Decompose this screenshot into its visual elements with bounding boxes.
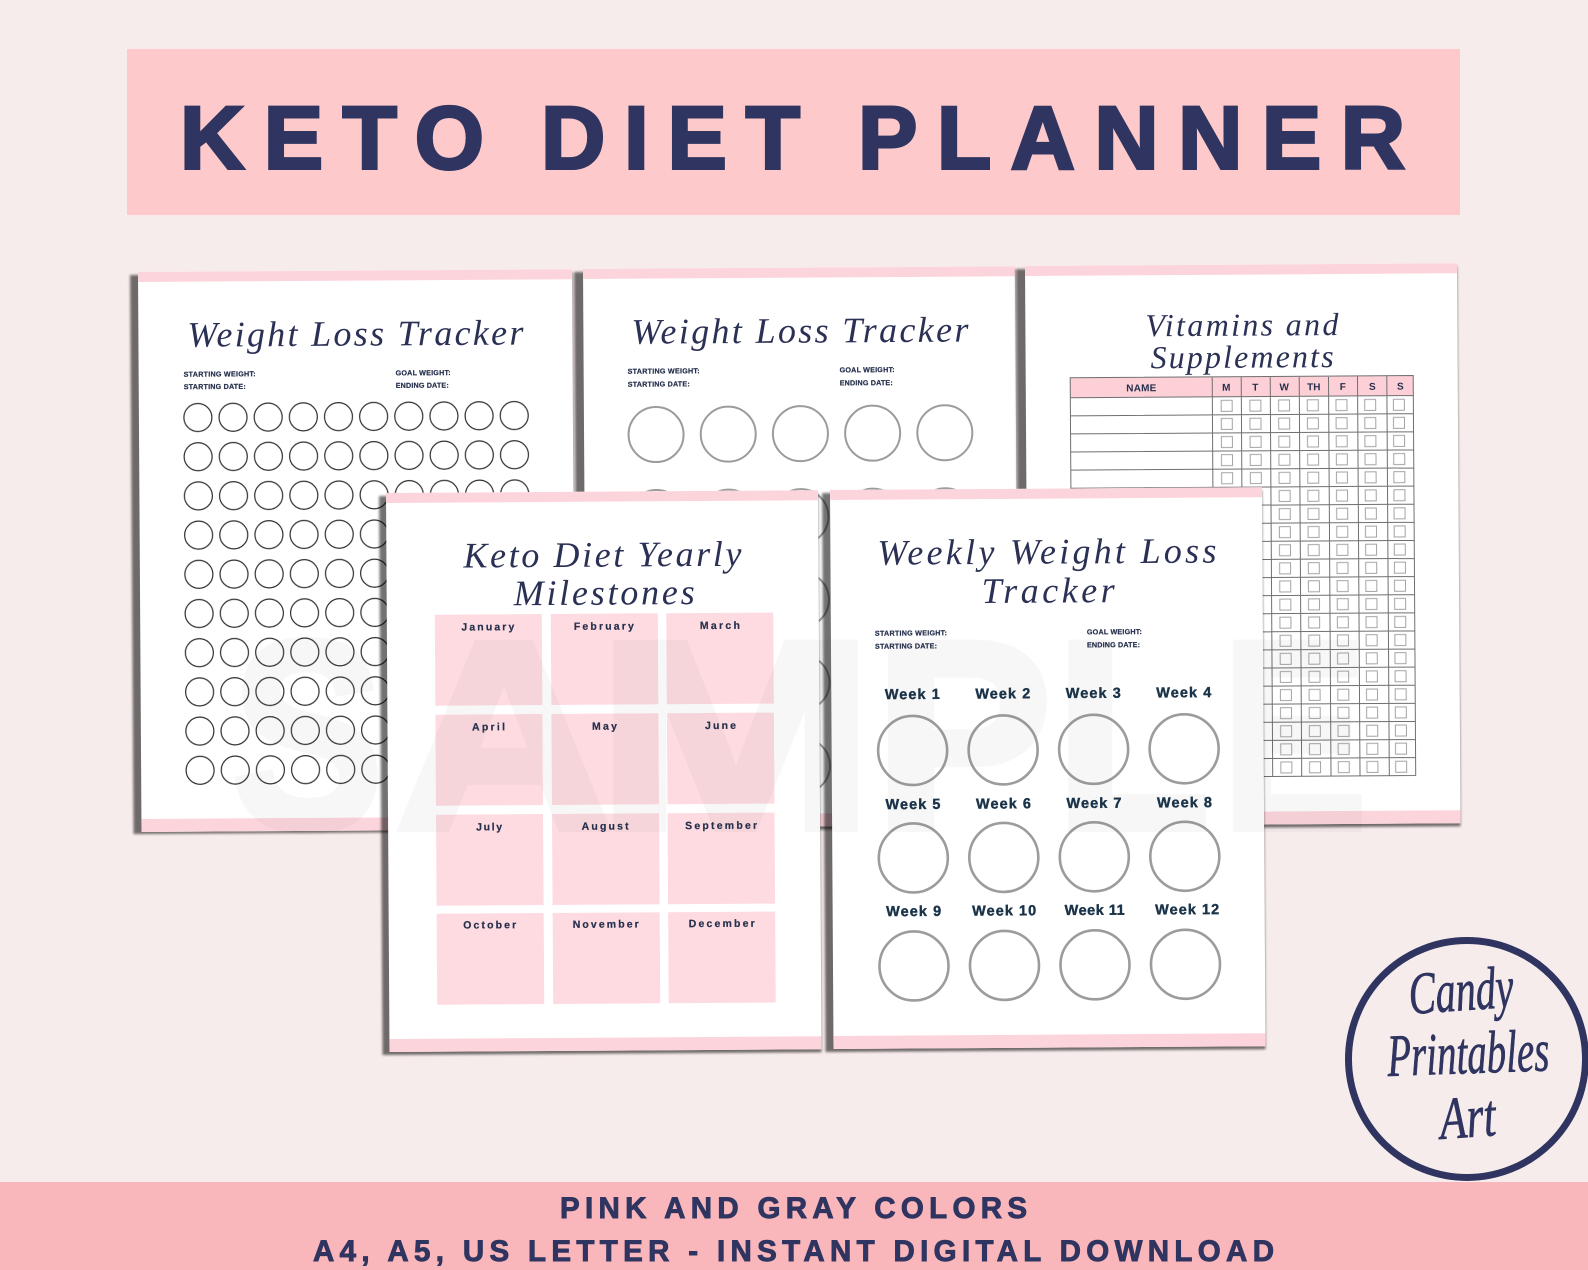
week circles <box>878 714 1220 1001</box>
week labels: Week 8 <box>1157 795 1212 811</box>
footer band <box>0 1182 1588 1270</box>
heading: Weekly Weight Loss <box>877 531 1217 573</box>
heading <box>1145 306 1340 375</box>
heading <box>462 534 742 614</box>
table header <box>1126 382 1404 394</box>
week labels: Week 6 <box>976 796 1031 813</box>
title banner <box>127 49 1460 215</box>
panel: vitamins and supplements <box>1016 263 1461 829</box>
week labels: Week 4 <box>1156 685 1211 701</box>
heading: Weight Loss Tracker <box>187 313 524 355</box>
month grid: October <box>463 919 516 932</box>
field labels: STARTING WEIGHT: <box>184 369 256 379</box>
sample watermark <box>232 585 1367 885</box>
month grid: April <box>472 721 505 733</box>
logo: candy printables art: Art <box>1434 1082 1499 1152</box>
footer band: A4, A5, US LETTER - INSTANT DIGITAL DOWNLOAD <box>313 1235 1274 1268</box>
week labels: Week 12 <box>1155 902 1219 918</box>
circle grid <box>180 396 534 790</box>
panel: weight loss tracker with large circles <box>574 266 1019 831</box>
field labels <box>184 368 451 391</box>
heading: Milestones <box>513 572 695 613</box>
field labels: GOAL WEIGHT: <box>1087 627 1142 636</box>
field labels: GOAL WEIGHT: <box>396 368 451 377</box>
table header: NAME <box>1126 383 1157 394</box>
field labels: STARTING WEIGHT: <box>628 366 700 376</box>
table header: TH <box>1307 382 1320 393</box>
sample watermark: P <box>874 585 1052 885</box>
field labels: STARTING DATE: <box>875 641 937 651</box>
field labels: STARTING DATE: <box>628 379 690 389</box>
week labels: Week 3 <box>1066 686 1121 702</box>
month grid: February <box>574 620 634 633</box>
field labels: STARTING DATE: <box>184 382 246 391</box>
heading: Supplements <box>1150 338 1334 375</box>
month grid: August <box>582 820 629 833</box>
title banner: PLANNER <box>858 88 1405 188</box>
field labels: GOAL WEIGHT: <box>840 365 895 374</box>
sample watermark: M <box>596 585 875 885</box>
table header: S <box>1397 382 1404 393</box>
table header: T <box>1252 383 1258 394</box>
month grid: January <box>461 621 515 634</box>
sample watermark: E <box>1222 585 1367 885</box>
field labels: ENDING DATE: <box>1087 640 1140 649</box>
month grid: December <box>689 918 755 930</box>
field labels: STARTING WEIGHT: <box>875 628 947 638</box>
footer band: PINK AND GRAY COLORS <box>560 1192 1027 1225</box>
panel: weight loss tracker with 100 circles <box>130 269 576 834</box>
table header: M <box>1222 383 1230 394</box>
field labels: ENDING DATE: <box>396 381 449 390</box>
week labels: Week 7 <box>1066 796 1122 812</box>
title banner: KETO <box>180 88 484 188</box>
field labels <box>628 365 895 389</box>
sample watermark: L <box>1055 585 1210 885</box>
week labels: Week 2 <box>975 686 1030 703</box>
week labels: Week 5 <box>885 797 941 813</box>
table header: W <box>1280 382 1290 393</box>
table header: S <box>1369 382 1376 393</box>
supplements table <box>1070 376 1416 778</box>
field labels <box>875 627 1142 651</box>
panel: keto diet yearly milestones <box>379 490 822 1055</box>
panel: weekly weight loss tracker <box>822 487 1266 1052</box>
field labels: ENDING DATE: <box>840 378 893 387</box>
table header: F <box>1340 382 1346 393</box>
month grid: May <box>592 721 617 733</box>
heading: Tracker <box>982 570 1116 611</box>
week labels: Week 1 <box>885 687 940 703</box>
checkboxes <box>1212 396 1416 777</box>
week labels: Week 9 <box>886 904 941 920</box>
week labels: Week 10 <box>972 903 1036 920</box>
sample watermark: A <box>395 585 613 885</box>
month grid: June <box>705 720 736 732</box>
heading <box>877 531 1217 612</box>
week labels <box>885 685 1219 920</box>
logo: candy printables art: Candy <box>1406 954 1516 1027</box>
title banner: DIET <box>541 88 800 188</box>
month grid: September <box>685 820 757 832</box>
logo: candy printables art <box>1348 940 1586 1178</box>
heading: Weight Loss Tracker <box>631 310 969 352</box>
month grid: March <box>700 620 740 632</box>
sample watermark: S <box>232 585 383 885</box>
month grid: November <box>573 918 639 931</box>
heading: Keto Diet Yearly <box>462 534 742 576</box>
month grid <box>435 613 776 1005</box>
week labels: Week 11 <box>1065 903 1125 919</box>
month grid: July <box>476 821 502 833</box>
large circle grid <box>628 405 975 794</box>
heading: Vitamins and <box>1145 306 1339 343</box>
